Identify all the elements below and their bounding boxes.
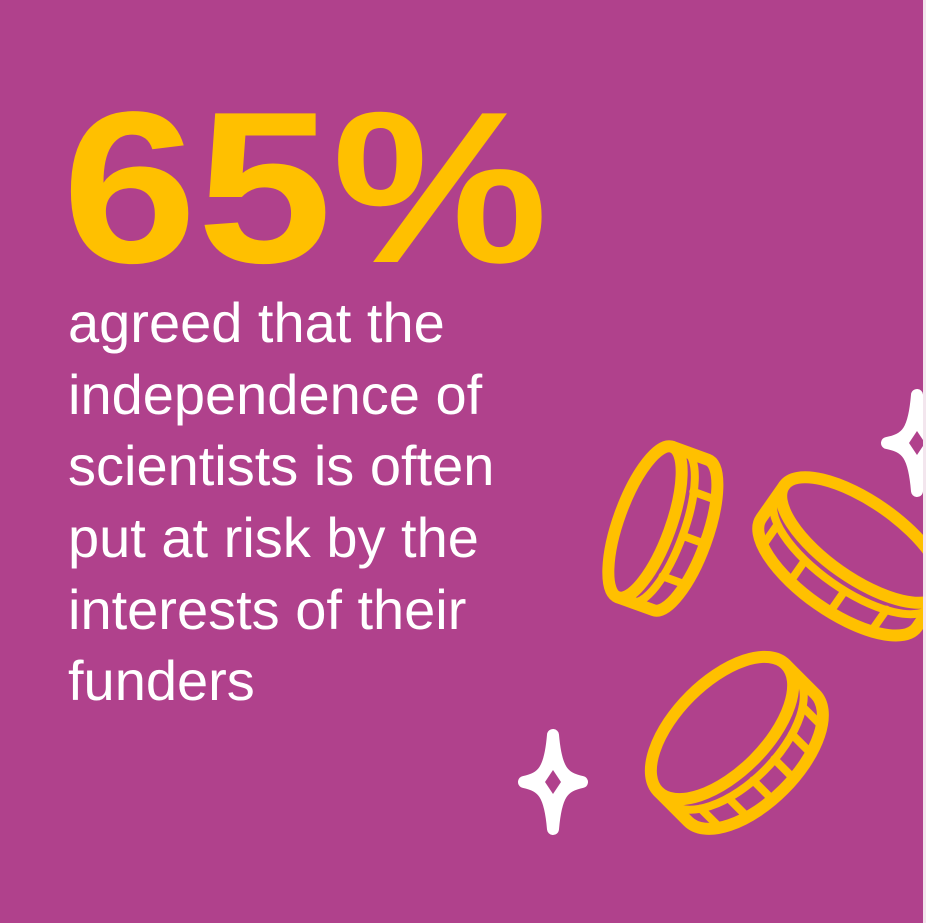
icon: sparkle top-right [887, 395, 926, 491]
body text: independence of [68, 363, 483, 426]
body text [68, 291, 494, 712]
headline: 65%: 65% [62, 66, 548, 308]
body text: scientists is often [68, 434, 494, 497]
body text: agreed that the [68, 291, 445, 354]
icon: sparkle bottom-left [524, 735, 582, 829]
body text: interests of their [68, 578, 466, 641]
icon: coin bottom [627, 633, 847, 853]
body text: put at risk by the [68, 506, 479, 569]
body text: funders [68, 649, 255, 712]
icon: coin top-left [593, 438, 733, 619]
icon: coin right [739, 454, 926, 658]
